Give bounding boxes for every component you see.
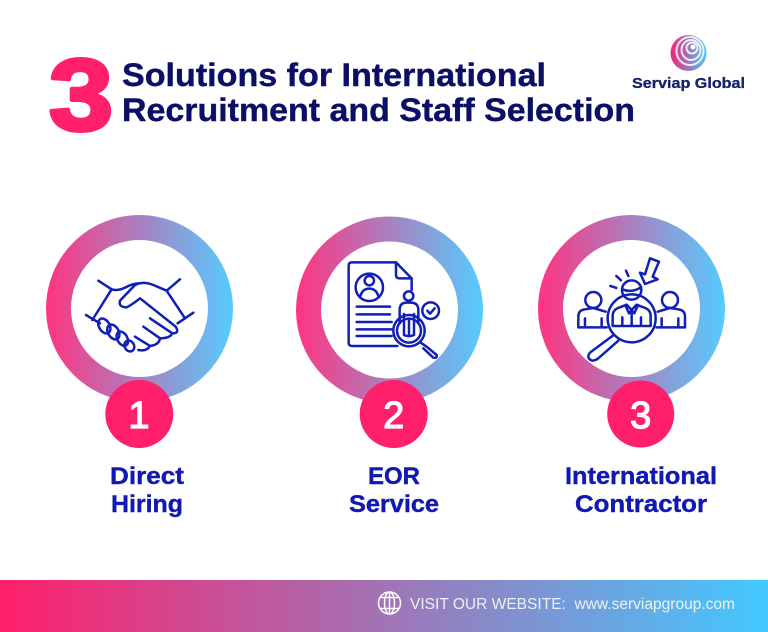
footer bar (0, 580, 768, 632)
label: EOR Service: EOR (368, 463, 420, 490)
step 1: Direct Hiring (58, 228, 220, 518)
label: International Contractor: Contractor (575, 491, 707, 518)
step 2: EOR Service: 2 (383, 395, 404, 437)
label: EOR Service: Service (349, 491, 439, 518)
big number 3: 3 (49, 39, 113, 151)
badge 1 (105, 380, 173, 448)
logo: Serviap Global: Serviap Global (632, 76, 745, 92)
step 3: International Contractor (550, 228, 717, 518)
icon: globe (378, 592, 400, 614)
icon: magnifier over candidates (578, 258, 685, 361)
title: Recruitment and Staff Selection (122, 92, 635, 128)
title: Solutions for International (122, 57, 546, 93)
step 2: EOR Service (308, 229, 470, 518)
label: Direct Hiring (110, 463, 184, 518)
title (122, 57, 635, 128)
step 3: International Contractor: 3 (630, 395, 651, 437)
icon: resume with person and magnifier (349, 262, 439, 358)
ring 1 (58, 228, 220, 390)
badge 3 (607, 380, 674, 448)
icon: handshake (86, 279, 193, 353)
label: Direct Hiring: Hiring (111, 491, 183, 518)
ring 2 (308, 229, 470, 391)
step 1: Direct Hiring: 1 (128, 395, 150, 437)
badge 2 (360, 380, 428, 448)
logo: Serviap Global (632, 35, 745, 92)
label: EOR Service (349, 463, 439, 518)
label: International Contractor: International (565, 463, 717, 490)
label: International Contractor (565, 463, 717, 518)
label: Direct Hiring: Direct (110, 463, 184, 490)
ring 3 (550, 228, 712, 390)
website text: VISIT OUR WEBSITE: www.serviapgroup.com (410, 596, 735, 613)
